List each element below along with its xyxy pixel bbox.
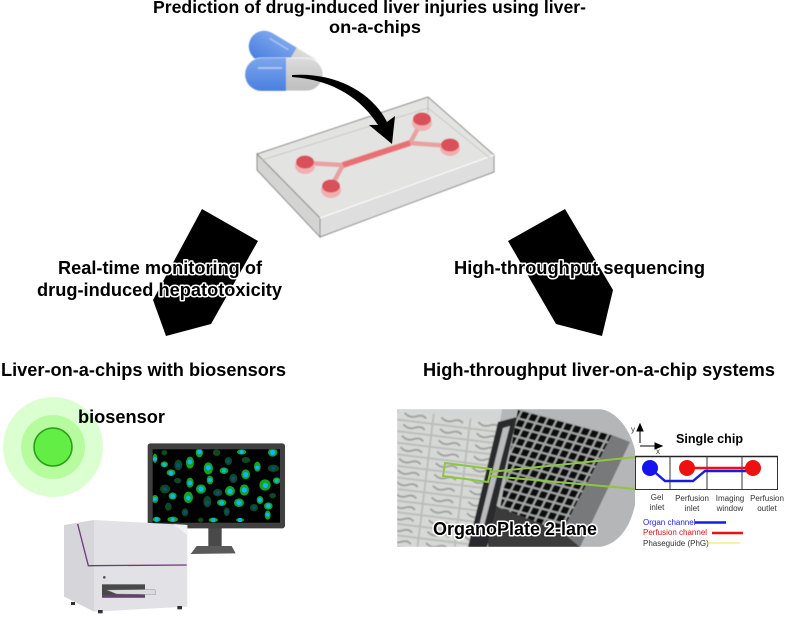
title xyxy=(153,0,586,37)
label: real-time monitoring: Real-time monitoring of xyxy=(58,258,263,278)
chip region labels: outlet xyxy=(757,504,778,513)
arrow: right pathway xyxy=(508,209,613,336)
chip wells xyxy=(295,112,460,198)
silver chip plate xyxy=(397,409,498,547)
diagram: axis: x xyxy=(656,447,660,456)
icon: monitor with cell image xyxy=(148,443,285,554)
legend: Perfusion channel xyxy=(643,528,707,537)
legend xyxy=(643,518,743,548)
legend: Organ channel xyxy=(643,518,696,527)
label: biosensor: biosensor xyxy=(78,407,165,427)
chip region labels: inlet xyxy=(650,503,665,512)
chip channels xyxy=(305,121,450,187)
fluorescent cells xyxy=(152,448,280,522)
arrow: left pathway xyxy=(153,209,258,336)
icon: plate reader instrument xyxy=(64,520,187,613)
photo: OrganoPlate xyxy=(397,409,650,547)
chip region labels xyxy=(650,493,784,513)
chip region labels: Imaging xyxy=(716,494,744,503)
heading: high-throughput systems: High-throughput liver-on-a-chip systems xyxy=(423,360,775,380)
label: OrganoPlate 2-lane: OrganoPlate 2-lane xyxy=(433,519,597,539)
label: high-throughput sequencing: High-throughput sequencing xyxy=(454,258,705,278)
chip region labels: window xyxy=(716,504,744,513)
diagram: axis: y xyxy=(631,425,635,434)
heading: single chip: Single chip xyxy=(676,432,743,446)
icon: liver-on-a-chip device xyxy=(257,97,494,237)
diagram: single chip xyxy=(635,456,778,490)
icon: drug capsules xyxy=(243,25,326,92)
label: real-time monitoring xyxy=(37,258,282,300)
callout: zoom lines to single chip xyxy=(443,457,636,489)
label: real-time monitoring: drug-induced hepatotoxicity xyxy=(37,280,282,300)
chip region labels: inlet xyxy=(685,504,700,513)
black well plate xyxy=(500,409,612,532)
heading: biosensors: Liver-on-a-chips with biosensors xyxy=(1,360,286,380)
chip region labels: Perfusion xyxy=(750,494,784,503)
plate frame xyxy=(486,409,635,547)
arrow: curved drug delivery xyxy=(292,75,395,144)
legend: Phaseguide (PhG) xyxy=(643,539,709,548)
title: on-a-chips xyxy=(329,17,421,37)
chip region labels: Gel xyxy=(651,493,663,502)
chip region labels: Perfusion xyxy=(675,494,709,503)
diagram: axis xyxy=(631,424,662,456)
icon: biosensor glow xyxy=(3,397,103,497)
